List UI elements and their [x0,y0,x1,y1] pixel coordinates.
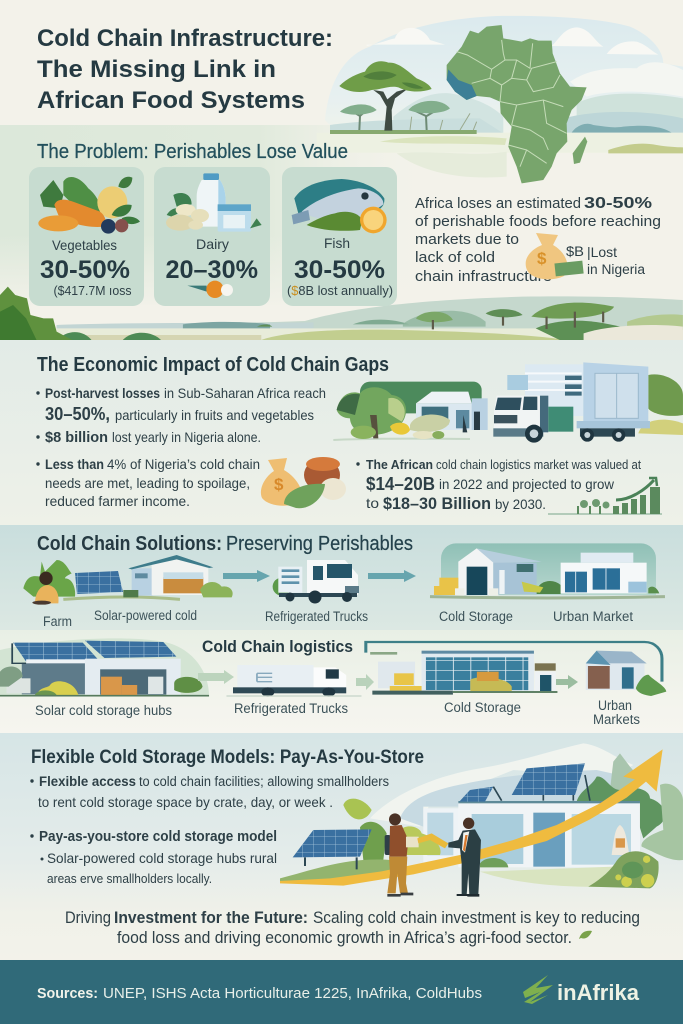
icon: vegetables [38,177,140,234]
illustration: logistics cold storage [372,651,557,693]
panel: fish [282,167,397,306]
bullet: less than 4 percent: Less than [45,456,104,472]
sources: Sources: [37,985,98,1002]
icon: small food [187,281,233,298]
chart icon: growth bars [548,478,662,514]
map: country borders [457,40,567,167]
arrow: to cold storage [368,570,416,582]
labels: logistics steps: Urban [598,698,632,713]
heading: cold chain solutions [37,533,413,555]
heading: flexible cold storage: Flexible Cold Storage Models: Pay-As-You-Store [31,747,424,768]
bullet: market size [356,457,641,513]
bullet: market size: $18–30 Billion [383,494,491,513]
text block: Africa losses: markets due to [415,232,519,248]
bullet: market size: to [366,495,379,511]
bullet: flexible access: to rent cold storage space by crate, day, or week . [38,794,333,810]
illustration: refrigerated truck [493,362,683,443]
bullet: pay-as-you-store: areas erve smallholders locally. [47,871,212,886]
value: vegetables: 30-50% [40,256,130,284]
bullet: pay-as-you-store [30,828,277,886]
icon: money bag: $ [537,249,547,268]
text block: Africa losses [415,195,661,285]
text block: driving investment [65,908,640,947]
arrow: to refrigerated trucks [223,570,270,582]
labels: logistics steps: Solar cold storage hubs [35,703,172,718]
bullet list: losses: Post-harvest losses [45,385,160,401]
icon: dairy [166,173,262,232]
bullet: flexible access: to cold chain facilities; allowing smallholders [139,774,389,789]
bullet: less than 4 percent: needs are met, leading to spoilage, [45,475,250,491]
bullet: flexible access [30,773,389,810]
illustration: cold storage [434,548,561,596]
callout: lost in Nigeria: in Nigeria [587,262,645,277]
bullet list: losses [36,385,326,446]
labels: solution steps: Farm [43,614,72,629]
text block: Africa losses: Africa loses an estimated [415,196,581,212]
map: Madagascar [573,137,587,164]
bullet list: losses: in Sub-Saharan Africa reach [164,385,326,401]
title: The Missing Link in [37,56,276,83]
bullet: market size: cold chain logistics market was valued at [436,457,641,472]
bullet: market size: in 2022 and projected to grow [439,476,615,492]
panel: flexible storage background [0,733,683,960]
bullet: market size: $14–20B [366,474,435,494]
heading: cold chain solutions: Cold Chain Solutions: [37,533,222,555]
labels: solution steps: Solar-powered cold [94,608,197,623]
text block: driving investment: Driving [65,908,111,927]
text block: driving investment: Investment for the Future: [114,908,308,927]
bullet: market size: by 2030. [495,496,546,512]
logo: inAfrika [523,975,640,1005]
labels: logistics steps: Refrigerated Trucks [234,701,348,716]
icon: ground solar panel [293,829,372,869]
illustration: urban market [561,553,659,593]
arrow: to urban markets [556,675,578,689]
footer [0,960,683,1024]
labels: solution steps: Refrigerated Trucks [265,609,368,624]
text block: Africa losses: lack of cold [415,250,495,266]
logo: inAfrika: inAfrika [557,980,640,1005]
illustration: solar cold storage hub [0,638,209,697]
heading: cold chain solutions: Preserving Perishables [226,533,413,555]
note: fish: ($8B lost annually) [287,283,393,298]
bullet: market size: The African [366,457,433,472]
bullet list: losses: 30–50%, [45,404,110,424]
illustration: white truck [273,560,359,604]
text block: Africa losses: of perishable foods before reaching [415,214,661,230]
value: dairy: 20–30% [166,256,258,284]
label: dairy: Dairy [196,236,229,252]
header landscape background [0,16,683,310]
icon: leaf [579,931,592,939]
title: African Food Systems [37,87,305,114]
icon: money bags and produce: $ [274,475,284,494]
arrow: to logistics cold store [356,674,374,690]
bullet list: losses: $8 billion [45,429,108,446]
title: Cold Chain Infrastructure: [37,25,333,52]
title [37,25,333,114]
icon: money bag [526,233,584,279]
panel: economic impact background [0,340,683,526]
panel: vegetables [29,167,144,306]
illustration: glass cold store [423,763,640,867]
text block: Africa losses: chain infrastructure [415,269,552,285]
bullet: less than 4 percent: 4% of Nigeria’s cold chain [107,456,260,472]
labels: logistics steps: Cold Storage [444,700,521,715]
icon: farmer shaking hands [385,813,419,897]
landscape strip [0,287,683,341]
illustration: logistics urban market [586,651,666,696]
labels: solution steps: Urban Market [553,609,633,624]
note: vegetables: ($417.7M ıoss [54,283,132,298]
bullet: less than 4 percent [36,456,260,509]
heading: cold chain logistics: Cold Chain logistics [202,637,353,656]
icon: golden handshake [417,833,448,848]
panel: storage and market backdrop [430,543,665,598]
icon: money bags and produce [261,457,346,508]
icon: investor in suit [448,818,481,897]
illustration: acacia trees [339,61,477,131]
arrow: return loop [366,642,662,682]
icon: solar panel [75,571,123,594]
text block: driving investment: food loss and driving economic growth in Africa’s agri-food sector. [117,928,572,947]
arrow: to logistics truck [198,670,234,684]
illustration: building and trees [333,382,488,440]
bullet: pay-as-you-store: Pay-as-you-store cold storage model [39,828,277,845]
callout: lost in Nigeria [566,243,645,277]
icon: fish [292,179,387,233]
panel: dairy [154,167,270,306]
panel: cold chain solutions background [0,525,683,630]
labels: logistics steps [35,698,640,727]
illustration: solar cold store [63,555,233,599]
icon: farmer [23,560,75,605]
illustration: investment scene [280,743,683,897]
illustration: logistics truck [226,665,361,697]
arrow: growth trend [280,749,663,886]
map highlight: west Africa [447,69,477,100]
bullet: pay-as-you-store: Solar-powered cold storage hubs rural [47,850,277,866]
callout: lost in Nigeria: |Lost [587,244,617,260]
bullet: less than 4 percent: reduced farmer income. [45,493,190,509]
bullet list: losses: lost yearly in Nigeria alone. [112,429,261,445]
bullet: flexible access: Flexible access [39,773,136,789]
text block: Africa losses: 30-50% [584,195,652,212]
label: vegetables: Vegetables [52,237,117,253]
labels: solution steps: Cold Storage [439,609,513,624]
labels: solution steps [43,608,633,629]
labels: logistics steps: Markets [593,712,640,727]
heading: the problem: The Problem: Perishables Lose Value [37,141,348,163]
label: fish: Fish [324,235,350,251]
Africa map [447,25,587,183]
callout: lost in Nigeria: $B [566,243,584,259]
bullet list: losses: particularly in fruits and vegetables [115,407,314,423]
heading: economic impact: The Economic Impact of Cold Chain Gaps [37,354,389,376]
value: fish: 30-50% [294,256,385,284]
panel: cold chain logistics background [0,630,683,733]
sources: UNEP, ISHS Acta Horticulturae 1225, InAfrika, ColdHubs [103,985,482,1002]
text block: driving investment: Scaling cold chain investment is key to reducing [313,908,640,927]
